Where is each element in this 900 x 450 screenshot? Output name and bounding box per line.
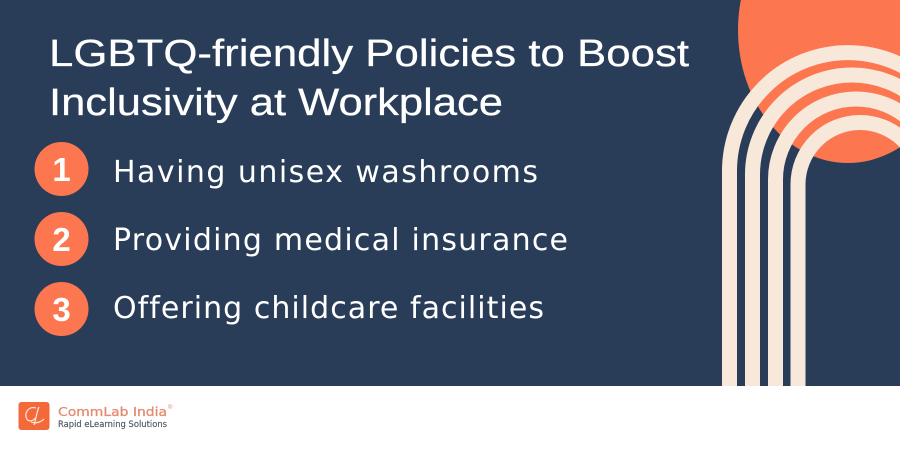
orange sun circle [738,0,900,163]
cream concentric arches [730,53,900,386]
list item 3: 3 [52,291,71,328]
logo tagline: Rapid eLearning Solutions [58,420,168,430]
footer logo [18,402,173,430]
list item 2: 2 [52,221,71,258]
list item 1 [34,142,538,196]
list item 3 [34,282,544,336]
list item 2: Providing medical insurance [113,223,568,258]
logo icon [18,402,50,430]
list item 1: Having unisex washrooms [113,155,538,190]
title [49,33,690,124]
title: Inclusivity at Workplace [49,82,503,124]
registered mark: ® [168,404,173,411]
list item 2 [34,212,568,266]
list item 1: 1 [52,151,71,188]
logo wordmark: CommLab India [58,404,167,419]
list item 3: Offering childcare facilities [113,291,544,326]
title: LGBTQ-friendly Policies to Boost [49,33,690,75]
